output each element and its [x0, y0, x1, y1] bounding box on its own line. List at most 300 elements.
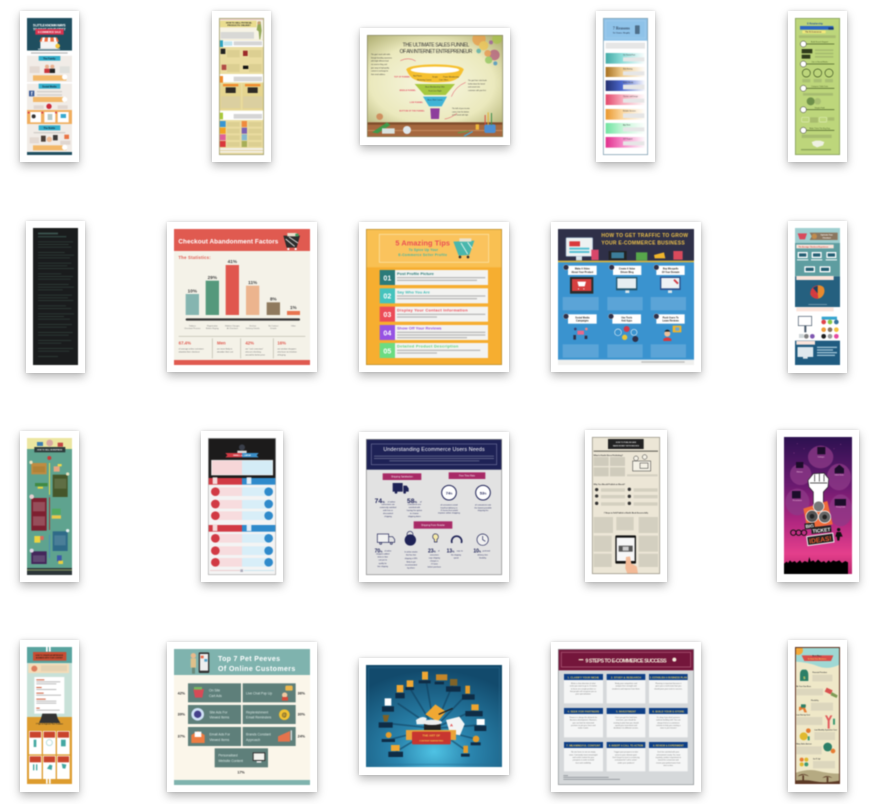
text: ring notes [438, 504, 492, 515]
header band: E-Commerce Seller Profile [398, 253, 447, 257]
bar chart: Registration [207, 324, 218, 327]
stat: 67.4%: of average online customers [179, 347, 204, 350]
header: teal title area: 5 LITTLE KNOWN WAYS [33, 23, 66, 27]
stat: 74% [375, 498, 396, 518]
box: replenishment email reminders [243, 705, 296, 724]
people pictograms [802, 49, 812, 59]
stat: 58% [407, 498, 422, 518]
step 3: should pave your route to success. [654, 687, 683, 690]
step 5: 5. INVESTMENT [616, 709, 636, 713]
step 3: Planning is important because it [655, 682, 682, 685]
bar chart: 1% [290, 305, 298, 310]
title banner: CONTENT MARKETING [419, 739, 444, 742]
tip 04 [380, 325, 488, 340]
stats bottom row: of online [384, 551, 391, 553]
panel: dark text infographic [26, 221, 85, 373]
body lines [38, 241, 74, 357]
step 3 [651, 265, 686, 310]
step 6: It's okay if you don't possess [657, 716, 680, 719]
box: site ads for viewed items [188, 705, 241, 724]
step 5: And Apps [621, 320, 633, 323]
box: personalised website content: Personalised [218, 754, 238, 758]
stat: 58%: 58% [407, 498, 417, 505]
step 4: Social Media [575, 317, 590, 319]
title: OF AN INTERNET ENTREPRENEUR [400, 49, 473, 55]
caption chips [379, 680, 486, 757]
bar chart: Hidden Charges [225, 325, 240, 327]
section: bottom monitor [795, 341, 840, 365]
stat: 42%: around for better price [245, 353, 266, 356]
stats bottom row: shoppers added [376, 554, 389, 556]
panel: how to get traffic infographic [551, 222, 701, 372]
text: ring notes: improve online shopping [438, 513, 460, 515]
step 7: 7. MEANINGFUL CONTENT [566, 743, 601, 747]
bar chart: No Contact [268, 324, 279, 327]
title: big ticket ideas [804, 522, 835, 546]
tip cards [29, 731, 70, 779]
box: email ads for viewed items [188, 727, 241, 746]
funnel: Power Membership [443, 77, 459, 79]
stat: 58%: shipping dates [408, 515, 421, 518]
step 4 [563, 314, 599, 358]
white document [34, 677, 64, 714]
box: email ads for viewed items: Email Ads For [209, 733, 231, 737]
section 1 heading [219, 40, 264, 47]
sources [563, 775, 620, 780]
step 2: weakness and improve from them. [612, 687, 640, 690]
header: Optimize Your [821, 234, 833, 237]
bar chart: 41% [228, 259, 238, 264]
box: on site cart ads: On Site [209, 689, 220, 693]
title banner [406, 730, 456, 744]
step 7: store. Constantly invest meaningful [569, 753, 598, 756]
header: To Choose Shopify [613, 32, 631, 34]
stat: 74%: extremely satisfied [380, 506, 396, 509]
stats bottom row: charges is [430, 560, 439, 562]
panel: big ticket ideas infographic: Webinars [797, 470, 803, 473]
box: brands constant approach: Brands Constant [246, 733, 271, 737]
stat: 16%: of buying [277, 354, 285, 356]
labels: funnel levels: BOTTOM OF THE FUNNEL [399, 111, 425, 113]
title plate: MAKE MONEY WITH EBOOKS [613, 445, 640, 448]
ribbon: shipping satisfaction: Shipping Satisfaction [391, 476, 414, 479]
stat: 58%: having the option [407, 509, 422, 512]
bar chart: Tedious [189, 325, 196, 327]
row 1: Financial Freedom [812, 672, 827, 674]
intro panel [28, 664, 69, 673]
header: Checkout Abandonment Factors [178, 239, 279, 246]
panel: big ticket ideas infographic: Presentations [793, 499, 802, 502]
text: right notes: further down the funnel [468, 82, 486, 85]
stat: 74%: shipping [384, 516, 392, 518]
footer [174, 780, 310, 785]
section 1 blocks [221, 49, 262, 72]
text: left note: The goal: reach with traffic [371, 53, 391, 56]
header text [38, 233, 66, 237]
step 1: 1. CLARIFY YOUR NICHE [567, 675, 599, 679]
step 7: No one loves to see an empty [571, 751, 596, 754]
orange section: 7 Tips to Improve Your Content [36, 723, 63, 726]
step 1: to focus on a single product so [571, 687, 596, 690]
text: right notes: comes from the bottom [452, 110, 470, 113]
stat: 67.4%: 67.4% [179, 341, 191, 346]
step 8: Don't forget to insert a convincing [612, 756, 640, 759]
step 9: 9. REVIEW & EXPERIMENT [653, 744, 684, 747]
stats bottom row: consumers [430, 554, 439, 556]
header: HOW TO SELL WORDPRESS [37, 450, 63, 452]
bar chart: 8% [270, 297, 278, 302]
stats bottom row: 13% [447, 548, 455, 554]
step 1: niche you want to go in. It's better [570, 685, 597, 688]
bar chart [184, 259, 300, 330]
row 4: Low Startup Cost [796, 713, 810, 716]
step 8: action in your ultimate goal. [615, 753, 638, 756]
percentages [178, 691, 306, 774]
stat: 58%: of [420, 501, 422, 503]
header: teal title area: TO MAKE YOUR FIRST [33, 27, 66, 31]
magic hat and cards: A [450, 723, 453, 728]
funnel [406, 64, 464, 119]
block: green [53, 472, 69, 497]
bar chart: At Checkout [227, 327, 238, 330]
footer [558, 360, 694, 365]
section: bottle ribbon: The Bottle [44, 127, 56, 130]
box: replenishment email reminders: Replenishment [246, 710, 268, 714]
step 7: prospects in order to build [573, 759, 594, 762]
step 4: Business development. However, [570, 719, 597, 722]
rows: second group [211, 534, 273, 567]
text: left note: give away to high quality [371, 66, 389, 69]
panel: publishing guide infographic: 7 Steps to Self-Publish a Kindle Book Successfully [604, 512, 648, 515]
step 3: 3. ESTABLISH A BUSINESS PLAN [650, 676, 687, 679]
step 2: Driven Blog [620, 272, 634, 274]
stats bottom row [375, 548, 490, 570]
tip 02: Say Who You Are [397, 289, 431, 294]
stats bottom row: 23% [428, 548, 437, 554]
crowd silhouette [784, 557, 848, 574]
panel: green e-commerce steps infographic: Simple Field [815, 107, 825, 109]
step 9: time to time. [663, 764, 674, 767]
icon: cart [453, 238, 474, 258]
panel: big ticket ideas infographic [777, 430, 859, 582]
header [27, 647, 72, 663]
step 8: 8. INSERT A CALL TO ACTION [609, 744, 643, 747]
stat: 67.4% [179, 341, 204, 353]
text: right notes [452, 79, 487, 117]
stats bottom row: cart just to [378, 559, 387, 562]
percentage rings [802, 69, 833, 77]
tip 01 [380, 270, 488, 285]
title: big ticket ideas: IDEAS! [809, 535, 832, 546]
title: big ticket ideas: TICKET [812, 527, 831, 535]
step 8: under your products! [618, 761, 635, 764]
text: ring notes: of consumers rated [440, 504, 458, 507]
bar chart: 10% [188, 288, 198, 293]
step 5: distribute it to different sectors. [614, 727, 639, 730]
step 4: 4. SEEK FOR PARTNERS [567, 709, 599, 713]
panel: the art of content marketing infographic [359, 658, 509, 775]
comparison box [211, 460, 273, 475]
tip 03: 03 [383, 312, 391, 319]
stat: 42%: are "cost conscious" [245, 347, 264, 350]
funnel: Front Line Right [428, 90, 442, 93]
panel: understanding ecommerce users needs infographic [359, 432, 509, 582]
step 5: starting to plan how you should [613, 721, 639, 724]
funnel: Not Plastic [413, 74, 422, 77]
stat: 74%: with free or [383, 509, 393, 512]
header band: 5 Amazing Tips [395, 239, 450, 248]
icon: handshake [812, 141, 824, 147]
stat: 16%: 16% [277, 341, 286, 346]
panel: typewriter content infographic [20, 640, 79, 792]
block: purple [30, 549, 47, 564]
text: right notes: of the funnel with high [452, 114, 468, 117]
step 7: trust and credibility. [576, 761, 592, 764]
icon: storefront [38, 37, 60, 50]
decoration: coloured circles [472, 32, 502, 65]
reasons: seven coloured bars: App Store [623, 124, 630, 127]
box: personalised website content: Website Content [218, 759, 243, 763]
row 2: Be Your Own Boss [796, 686, 811, 688]
bar chart: Delivery Details [246, 327, 260, 330]
stats bottom row: the shipping [451, 553, 461, 556]
panel: optimize your checkout experience infographic [788, 221, 847, 373]
section 3 coloured icons [220, 121, 262, 147]
step 3 [649, 674, 688, 703]
stat: 42% [245, 341, 266, 356]
title [400, 42, 473, 55]
step 2: analyze their strength and [615, 685, 637, 688]
reasons: seven coloured bars: 24/7 Support [623, 138, 633, 141]
percentages: 17% [237, 770, 245, 774]
panel: publishing guide infographic [585, 430, 667, 582]
tip icons [33, 740, 66, 770]
step 2: Create A Value [619, 268, 636, 271]
step 4: you can look for interested [573, 721, 594, 724]
scene illustrations [34, 464, 63, 564]
header: Checkout [822, 236, 831, 239]
stat: men: abandon their cart [217, 350, 234, 353]
text: right notes: and convert into [468, 86, 480, 89]
scenic footer [795, 770, 840, 784]
box: personalised website content [215, 748, 268, 767]
stats bottom row: recommended [405, 565, 417, 567]
box: brands constant approach: Approach [246, 738, 260, 742]
percentages: 36% [298, 691, 306, 695]
text: ring notes: the lowest possible [475, 506, 492, 509]
labels: funnel levels: MIDDLE FUNNEL [399, 90, 417, 92]
header: HOW TO CREATE AN IMPRESSIVE [36, 654, 64, 657]
title plate [608, 439, 644, 449]
percentages: 39% [178, 713, 186, 717]
row 1 [800, 670, 832, 681]
bar chart: Unclear [249, 325, 256, 327]
funnel: Cost Offers [439, 78, 448, 81]
arrows [400, 59, 466, 119]
box: brands constant approach [243, 727, 296, 746]
step 3: Buy Misspells [663, 269, 679, 271]
box: replenishment email reminders: Email Reminders [246, 716, 272, 720]
header [558, 229, 694, 262]
bar chart: 29% [208, 275, 218, 280]
icon: pinterest [46, 104, 52, 109]
labels: funnel levels: TOP OF FUNNEL [394, 77, 411, 79]
step 6: 6. BUILD YOUR E-STORE [652, 709, 685, 713]
icon: tablet and hand [615, 535, 638, 574]
header: SMALL vs. LARGE [233, 454, 252, 457]
step 4: Finance is always the obstacle for [570, 716, 597, 719]
intro text: What Is Kindle Direct Publishing? [594, 454, 624, 457]
step 5: spend your investment and [615, 724, 637, 727]
step 3: Of Your Domain [662, 272, 680, 274]
stat: 74%: 74% [375, 498, 385, 505]
bar chart: 11% [248, 280, 258, 285]
panel: little known ways infographic [20, 11, 79, 162]
header: Top 7 Pet Peeves [218, 656, 280, 663]
stats bottom row: qualify for [379, 563, 387, 565]
block: blue [53, 529, 69, 551]
stat: men [217, 341, 234, 353]
band: three tips [27, 110, 72, 124]
stats bottom row: In online retailer [404, 550, 418, 553]
section 2 blocks [220, 84, 263, 110]
labels: funnel levels [394, 77, 425, 113]
header [219, 18, 264, 40]
panel: cream illustrated tips infographic [788, 640, 847, 792]
step 8: and powerful "call to action" [615, 759, 638, 762]
step 5 [607, 314, 643, 358]
ribbon: free-time rates: Free Time Rate [459, 475, 476, 478]
header [795, 228, 840, 243]
step 6 [649, 708, 688, 737]
tip 02 [380, 288, 488, 303]
panel: big ticket ideas infographic: Pricing Guide [836, 506, 845, 509]
ring stats [442, 485, 490, 500]
step 6: Leave Reviews [662, 321, 680, 323]
panel: green e-commerce steps infographic [788, 11, 847, 162]
block: red [29, 494, 47, 531]
panel: green e-commerce steps infographic: Build Search Support [811, 41, 829, 44]
title: big ticket ideas: BIG [805, 523, 814, 529]
step 8: Trigger your prospects to take [614, 751, 638, 754]
percentages: 37% [178, 734, 186, 738]
step 1 [563, 265, 599, 310]
step 2 [607, 265, 643, 310]
section: benefits: Why You Should Publish an Ebook? [594, 484, 626, 486]
box: on site cart ads: Cart Ads [209, 694, 222, 698]
bar chart: Checkout Process [184, 327, 200, 330]
icon: people [44, 65, 55, 73]
stats bottom row: 10% [473, 548, 482, 554]
footer [27, 568, 72, 575]
header: YOUR E-COMMERCE BUSINESS [601, 240, 685, 246]
stats bottom row: shipping is 58% [405, 558, 418, 560]
text: right notes: The bulk of your income [452, 108, 470, 110]
step 8 [607, 742, 645, 771]
section: white colour palette [796, 307, 839, 339]
stats bottom row: says its [457, 550, 463, 553]
panel: big ticket ideas infographic: Catalogue [818, 455, 825, 458]
header: teal title area: E-COMMERCE SALE [38, 31, 61, 34]
funnel: Basic Web Course [427, 99, 443, 101]
stats bottom row: likely to get [406, 560, 416, 563]
step 9: Don't be satisfied with your [657, 751, 680, 754]
stats bottom row: free shipping [377, 566, 388, 568]
stat: 74%: of online [388, 501, 396, 503]
step 4: partners to join your force and [571, 724, 595, 727]
text: left note [371, 53, 392, 76]
panel: green e-commerce steps infographic: Make Them The Buy Day [809, 128, 830, 130]
panel: how to sell in-game timeline infographic [20, 431, 79, 582]
step 6: always find an e-commerce [657, 722, 679, 724]
panel: checkout abandonment factors infographic [167, 222, 317, 372]
desk and props [367, 112, 503, 137]
header: E-Retailership [807, 22, 823, 25]
step 6: website building skill. You can [656, 719, 680, 722]
step 5: Once you get the fund from [615, 716, 638, 719]
step 1: your specialization. [576, 693, 592, 696]
stat: 42%: 42% [245, 341, 254, 346]
icon: raised fist [808, 473, 829, 504]
step 9: review your performance from [656, 762, 681, 764]
icon: truck [393, 483, 409, 494]
box: on site cart ads [188, 683, 241, 702]
stats bottom row: speed [454, 557, 458, 559]
footer [174, 360, 310, 365]
row 1: $ [803, 675, 806, 680]
step 7: and useful content for your [573, 756, 595, 759]
tip 05: 05 [383, 348, 391, 355]
stat: 16%: who have no intention [277, 350, 297, 353]
stars and blobs [785, 446, 852, 526]
text: ring notes: shipping fee [478, 510, 489, 512]
box: email ads for viewed items: Viewed Items [209, 738, 230, 742]
percentages: 30% [298, 713, 306, 717]
band: second pair [208, 524, 276, 532]
text: left note: their email address. [371, 73, 386, 76]
step 1: that people will recognize you as [570, 690, 597, 693]
icon: shopper with phone [191, 652, 209, 674]
timeline spine [47, 456, 51, 558]
tip 05 [380, 343, 488, 358]
percentages: 24% [298, 734, 306, 738]
step 4: make it work. [578, 727, 589, 730]
icon: handshake [41, 135, 69, 142]
header [174, 649, 310, 675]
title plate: HOW TO PUBLISH AND [616, 441, 637, 444]
reasons: seven coloured bars: Themes and Design [623, 96, 638, 98]
heading: statistics: The Statistics: [178, 255, 211, 260]
venn chart [803, 93, 833, 105]
panel: green e-commerce steps infographic: Use in Social Media [812, 62, 829, 64]
stat: 67.4%: abandon their checkout [179, 350, 200, 353]
icon: shopping cart [283, 233, 300, 250]
header: 9 STEPS TO E-COMMERCE SUCCESS [585, 658, 667, 664]
tip 03 [380, 307, 488, 322]
bar chart: Other [291, 324, 296, 327]
header: 7 Reasons [613, 25, 630, 30]
row 7: Go IT, Up! [813, 758, 821, 760]
step 4: Campaigns [576, 321, 589, 323]
step 9: tweak the conversion and [658, 759, 679, 762]
stat: 74%: discounted [383, 512, 393, 515]
text: right notes: The goal here: take leads [468, 79, 487, 82]
funnel: Marketing Course [417, 78, 432, 81]
header [603, 18, 648, 41]
stats bottom row: before purchase [428, 567, 441, 569]
header: Understanding Ecommerce Users Needs [383, 447, 485, 453]
reasons: seven coloured bars [606, 53, 646, 148]
